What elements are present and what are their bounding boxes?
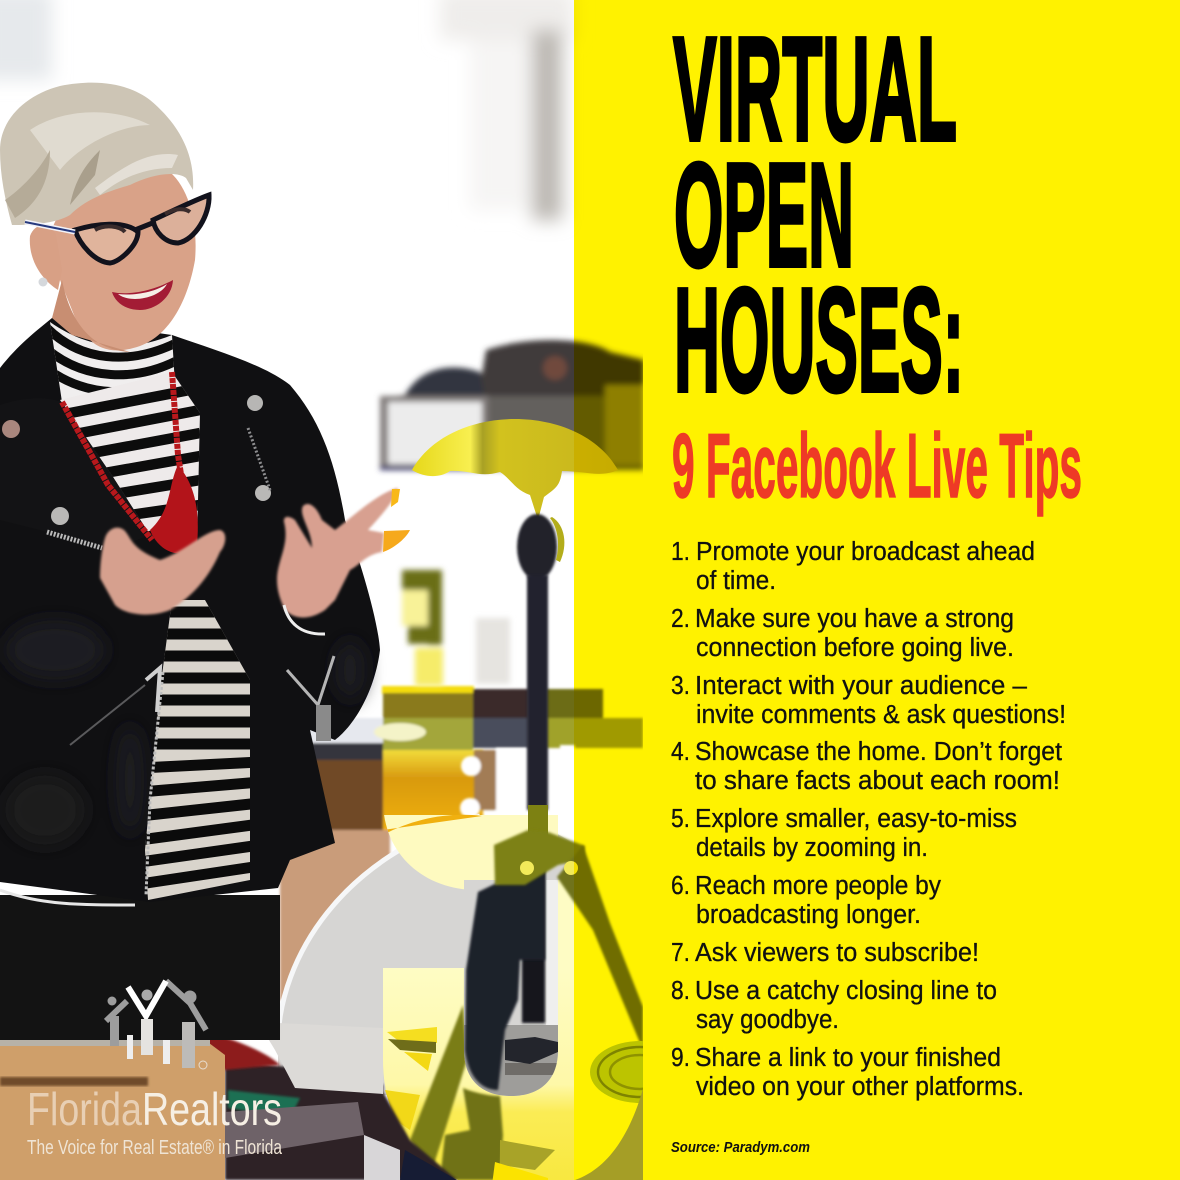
stud earring [38, 278, 48, 286]
face and neck [52, 171, 196, 350]
yellow nails [391, 489, 400, 507]
jacket lapel over the shirt [0, 398, 150, 552]
leather jacket [0, 318, 380, 902]
title: OPEN [674, 133, 854, 298]
folder, wooden box and books [0, 1022, 457, 1180]
letterform top arch [412, 419, 618, 520]
source note: Source: Paradym.com [671, 1140, 810, 1156]
tip 1: of time. [696, 567, 776, 595]
title [673, 7, 964, 423]
tip 1: Promote your broadcast ahead [696, 538, 1035, 566]
jacket studs and zips [247, 395, 263, 411]
shelf band and background behind the table [280, 686, 643, 1000]
tip 5: 5. [671, 805, 690, 833]
tips list [671, 538, 1066, 1101]
blurred shelf objects [402, 570, 510, 686]
tip 4: 4. [671, 738, 690, 766]
woman presenting [0, 83, 410, 1040]
tip 3 [671, 672, 1066, 729]
tip 2: Make sure you have a strong [695, 605, 1014, 633]
background windows [0, 0, 574, 220]
white shirt cuff [284, 605, 325, 634]
tip 3: 3. [671, 672, 690, 700]
tip 6: Reach more people by [695, 872, 941, 900]
tip 9: video on your other platforms. [696, 1073, 1024, 1101]
tip 8 [671, 977, 997, 1034]
tip 9: Share a link to your finished [695, 1044, 1001, 1072]
floor outside the letterform [575, 1085, 644, 1180]
cat-eye glasses [25, 195, 209, 263]
tip 2: connection before going live. [696, 634, 1014, 662]
tip 4 [671, 738, 1062, 795]
yellow text panel [643, 0, 1180, 1180]
trousers [0, 895, 280, 1040]
camera [380, 340, 644, 470]
bowl counter details [460, 745, 575, 845]
presenting hands [100, 528, 225, 615]
tip 4: Showcase the home. Don’t forget [695, 738, 1062, 766]
tip 8: say goodbye. [696, 1006, 839, 1034]
icon: house with people [106, 981, 207, 1069]
striped turtleneck [50, 322, 174, 400]
counter of the letterform with dark tripod leg and phone [464, 880, 560, 1100]
tip 7: Ask viewers to subscribe! [695, 939, 979, 967]
tripod legs over the letterform [410, 1005, 555, 1180]
tip 9: 9. [671, 1044, 690, 1072]
tip 2: 2. [671, 605, 690, 633]
round white table [278, 816, 574, 1095]
bowl of the pale yellow letterform [383, 815, 563, 895]
tip 3: invite comments & ask questions! [696, 701, 1066, 729]
tripod and microphone [465, 514, 643, 1090]
logo: Florida Realtors [27, 981, 283, 1159]
tip 1 [671, 538, 1035, 595]
papers and yellow shapes in the letterform [385, 1027, 437, 1130]
smile [112, 280, 173, 310]
lower pale yellow letterform [383, 880, 574, 1180]
rope coaster [590, 1041, 690, 1103]
tip 9 [671, 1044, 1024, 1101]
tip 1: 1. [671, 538, 690, 566]
tip 5: Explore smaller, easy-to-miss [695, 805, 1017, 833]
yellow vertical band [574, 0, 644, 1180]
tip 6 [671, 872, 941, 929]
hair fringe [0, 83, 193, 225]
tip 8: Use a catchy closing line to [695, 977, 997, 1005]
tip 4: to share facts about each room! [695, 767, 1060, 795]
tagline: The Voice for Real Estate® in Florida [27, 1137, 283, 1159]
tip 7: 7. [671, 939, 690, 967]
tip 8: 8. [671, 977, 690, 1005]
tip 5: details by zooming in. [696, 834, 928, 862]
tip 6: broadcasting longer. [696, 901, 921, 929]
tip 2 [671, 605, 1014, 662]
wordmark: FloridaRealtors [27, 1083, 282, 1135]
red beaded necklace [62, 372, 190, 550]
panel: photo of agent filming a broadcast [0, 0, 690, 1180]
tip 6: 6. [671, 872, 690, 900]
tip 5 [671, 805, 1017, 862]
tip 3: Interact with your audience – [695, 672, 1028, 700]
